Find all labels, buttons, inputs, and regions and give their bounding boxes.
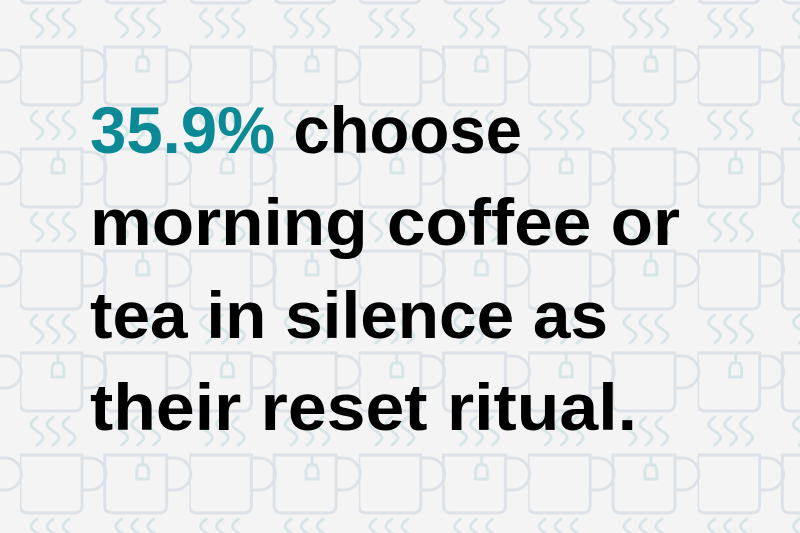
line 2: morning coffee or <box>90 185 680 259</box>
line 1 with highlighted percentage: 35.9% choose <box>90 93 522 167</box>
headline statement <box>90 93 680 444</box>
line 4: their reset ritual. <box>90 370 637 444</box>
line 3: tea in silence as <box>90 278 608 352</box>
